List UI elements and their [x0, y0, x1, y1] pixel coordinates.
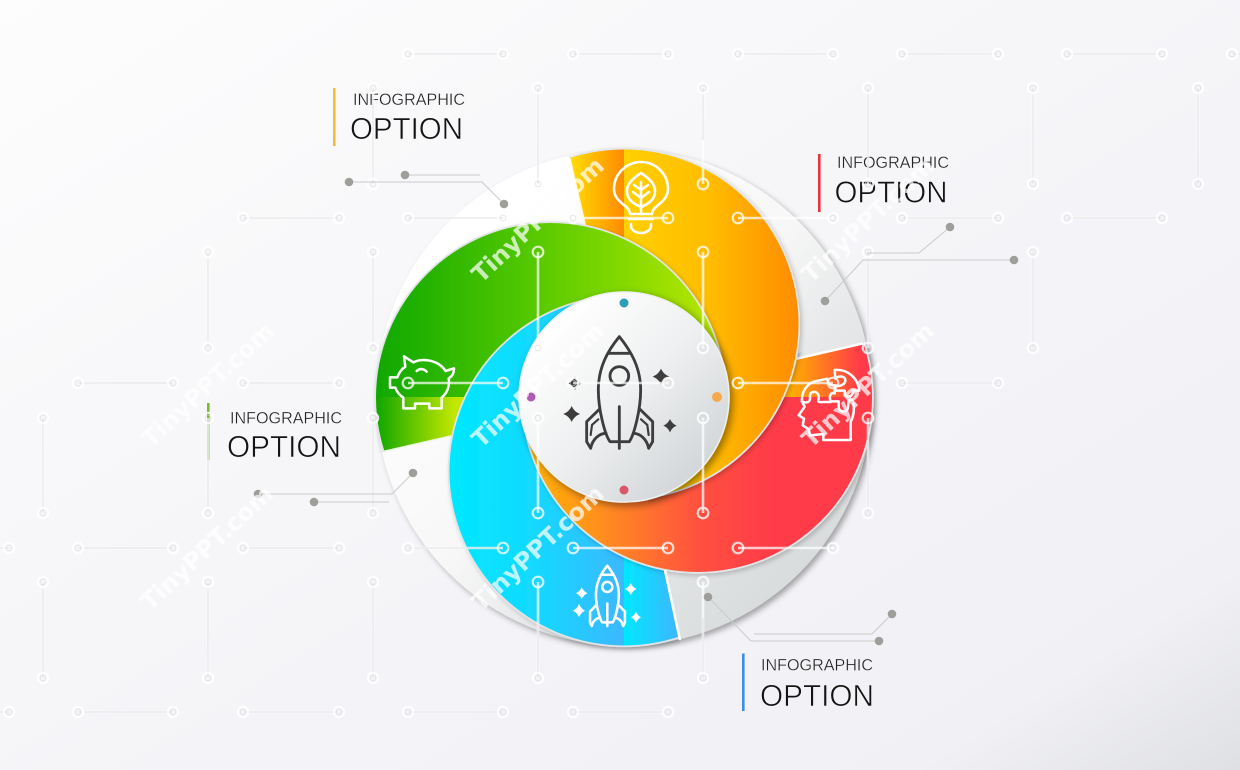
marker dots	[526, 298, 722, 494]
watermarks: TinyPPT.com	[135, 480, 279, 616]
icon: rocket small	[590, 566, 625, 626]
label: red option: OPTION	[834, 176, 948, 210]
label: red option: INFOGRAPHIC	[837, 154, 949, 172]
icon: lightbulb with leaf	[614, 162, 668, 233]
connector: yellow label traces	[345, 171, 508, 208]
connector: blue label traces	[704, 593, 896, 645]
green segment	[374, 221, 728, 452]
blue edge	[665, 570, 680, 640]
label: blue option	[742, 654, 874, 713]
watermarks	[135, 152, 940, 616]
connector: red label traces	[821, 223, 1018, 305]
label: red option	[818, 154, 949, 212]
watermarks: TinyPPT.com	[796, 152, 940, 288]
label: green option	[207, 403, 342, 464]
yellow segment lower overlap	[648, 352, 802, 502]
outer disc	[376, 150, 872, 646]
label: blue option: INFOGRAPHIC	[761, 656, 873, 674]
icon: rocket	[563, 337, 677, 448]
label: yellow option	[333, 88, 465, 146]
icon: small sparkles	[573, 583, 641, 623]
icon: piggy bank	[390, 356, 454, 408]
icon: puzzle head	[799, 370, 859, 440]
watermarks: TinyPPT.com	[466, 317, 610, 453]
label: green option: OPTION	[227, 430, 341, 464]
label: yellow option: OPTION	[350, 112, 463, 146]
watermarks: TinyPPT.com	[136, 317, 280, 453]
label: yellow option: INFOGRAPHIC	[353, 91, 465, 109]
label: blue option: OPTION	[760, 679, 874, 713]
watermarks: TinyPPT.com	[796, 317, 940, 453]
centre circle	[519, 292, 729, 502]
blue segment	[448, 299, 680, 652]
yellow segment	[569, 148, 804, 370]
label: green option: INFOGRAPHIC	[230, 410, 342, 428]
connector: green label traces	[254, 469, 417, 506]
spiral wheel	[374, 148, 879, 652]
watermarks: TinyPPT.com	[466, 480, 610, 616]
red segment	[524, 342, 878, 578]
watermarks: TinyPPT.com	[466, 152, 610, 288]
